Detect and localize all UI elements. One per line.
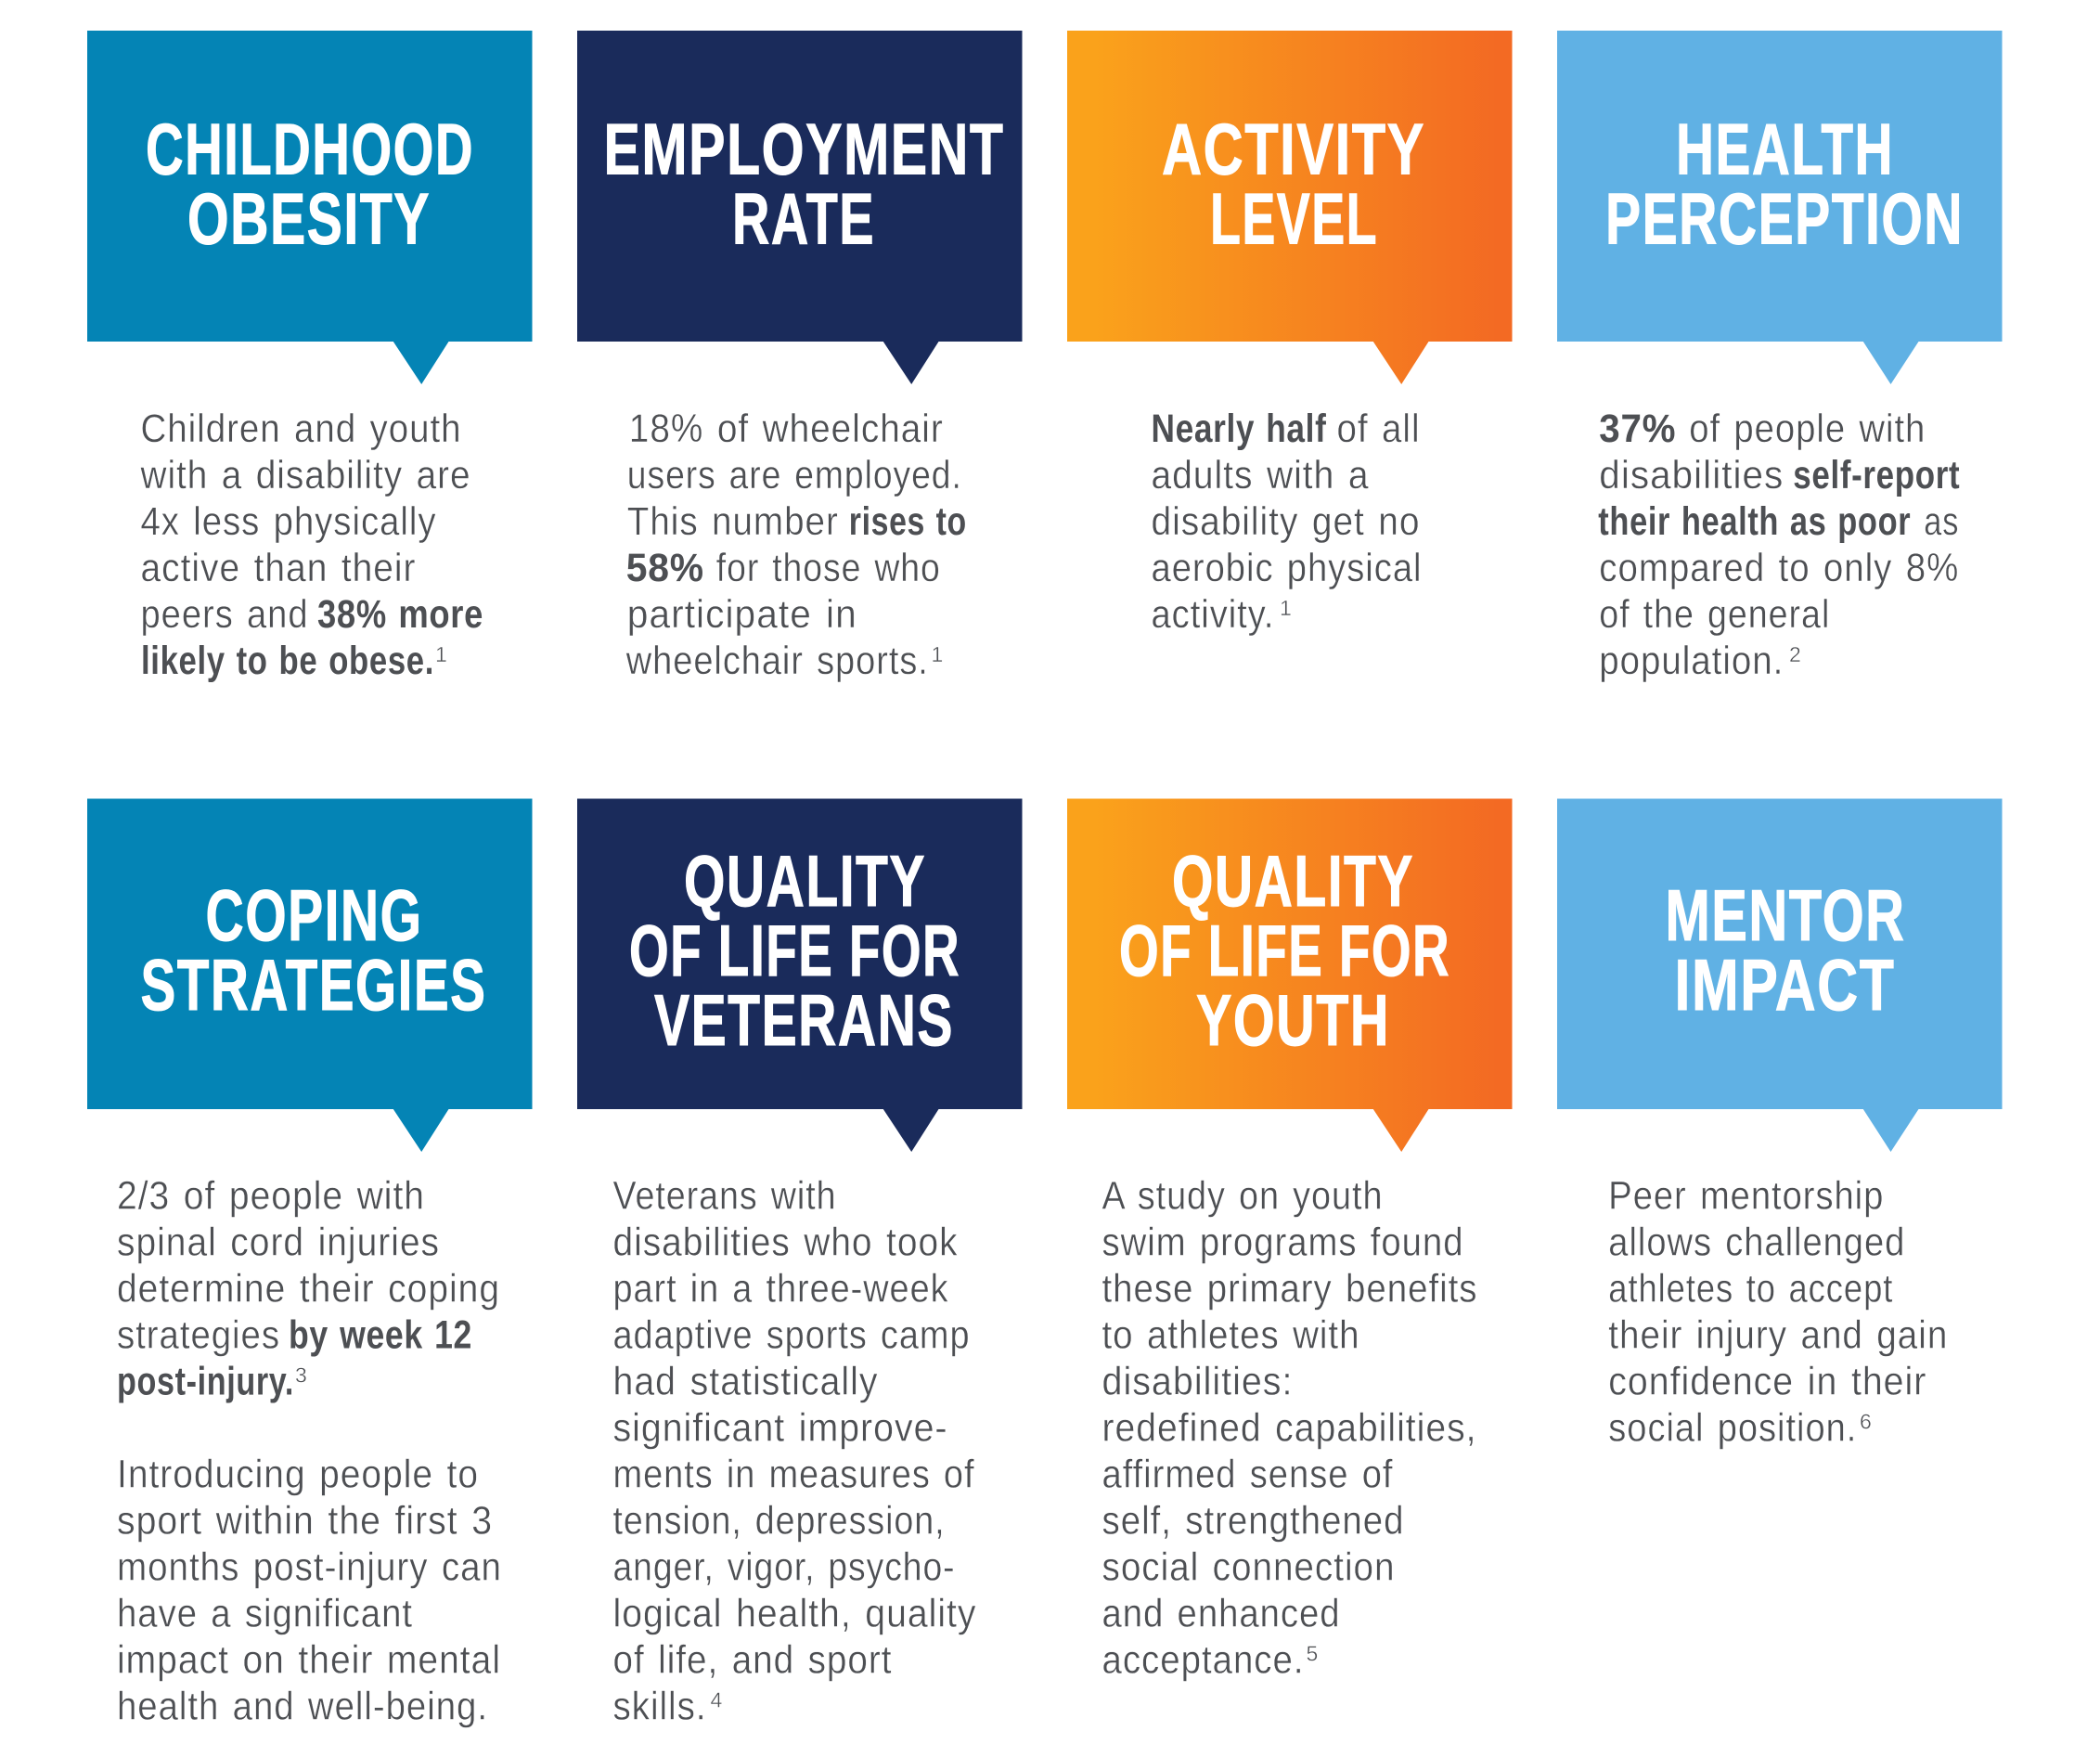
heading: childhood obesity <box>146 108 474 260</box>
text: quality of life for veterans: significant improve- <box>612 1405 948 1450</box>
text: quality of life for veterans: logical health, quality <box>612 1591 976 1635</box>
text: coping strategies: health and well-being. <box>117 1684 488 1728</box>
panel: activity level <box>1067 31 1513 637</box>
text: quality of life for veterans: skills. <box>612 1684 707 1728</box>
heading: employment rate: EMPLOYMENT <box>603 108 1004 189</box>
text: quality of life for youth: and enhanced <box>1102 1591 1340 1635</box>
heading: employment rate <box>603 108 1004 260</box>
heading: quality of life for veterans <box>629 840 960 1061</box>
text: childhood obesity: active than their <box>141 546 416 590</box>
text: coping strategies: 3 <box>295 1363 307 1387</box>
text: health perception: of the general <box>1599 592 1830 637</box>
heading: coping strategies: STRATEGIES <box>141 944 486 1026</box>
text: activity level: Nearly half <box>1151 407 1327 451</box>
heading: childhood obesity: OBESITY <box>187 178 431 260</box>
text: quality of life for youth: swim programs found <box>1102 1220 1464 1264</box>
text: quality of life for veterans: anger, vigor, psycho- <box>612 1544 956 1589</box>
text: employment rate <box>625 407 967 683</box>
text: quality of life for youth: social connection <box>1102 1544 1396 1589</box>
heading: mentor impact: IMPACT <box>1674 944 1895 1026</box>
text: coping strategies: 2/3 of people with <box>117 1173 425 1218</box>
text: coping strategies: determine their coping <box>117 1266 500 1311</box>
text: quality of life for veterans: part in a three-week <box>612 1266 948 1311</box>
text: health perception: compared to only 8% <box>1599 546 1959 590</box>
panel: coping strategies <box>87 798 533 1728</box>
text: coping strategies: impact on their mental <box>117 1637 501 1682</box>
text: activity level: disability get no <box>1151 499 1420 544</box>
text: employment rate: This number <box>627 499 839 544</box>
text: mentor impact: 6 <box>1860 1409 1872 1433</box>
text: employment rate: 58% <box>626 546 704 590</box>
heading: coping strategies <box>141 874 486 1026</box>
text: quality of life for youth: self, strengthened <box>1102 1498 1405 1543</box>
text: mentor impact: their injury and gain <box>1608 1312 1948 1357</box>
heading: quality of life for youth <box>1119 840 1450 1061</box>
text: quality of life for youth: A study on youth <box>1102 1173 1383 1218</box>
text: quality of life for veterans <box>612 1173 976 1728</box>
text: mentor impact: confidence in their <box>1608 1359 1926 1403</box>
heading: quality of life for veterans: OF LIFE FOR <box>629 910 960 991</box>
text: mentor impact <box>1608 1173 1948 1450</box>
text: health perception <box>1598 407 1960 683</box>
text: activity level: activity. <box>1151 592 1275 637</box>
text: health perception: population. <box>1599 639 1784 683</box>
heading: coping strategies: COPING <box>206 874 423 956</box>
callout box: health perception <box>1557 31 2003 384</box>
text: employment rate: rises to <box>849 499 967 544</box>
text: coping strategies: strategies <box>117 1312 280 1357</box>
panel: mentor impact <box>1557 798 2003 1450</box>
text: health perception: disabilities <box>1599 453 1784 497</box>
panel: health perception <box>1557 31 2003 683</box>
text: employment rate: 18% of wheelchair <box>629 407 944 451</box>
text: coping strategies: by week 12 <box>289 1312 472 1357</box>
text: quality of life for veterans: disabilities who took <box>612 1220 958 1264</box>
callout box: quality of life for youth <box>1067 798 1513 1152</box>
heading: mentor impact: MENTOR <box>1665 874 1906 956</box>
text: childhood obesity: likely to be obese. <box>141 639 434 683</box>
heading: health perception <box>1605 108 1964 260</box>
heading: childhood obesity: CHILDHOOD <box>146 108 474 189</box>
panel: quality of life for veterans <box>577 798 1023 1728</box>
heading: quality of life for veterans: VETERANS <box>654 979 954 1061</box>
callout box: childhood obesity <box>87 31 533 384</box>
heading: activity level: ACTIVITY <box>1162 108 1425 189</box>
text: activity level <box>1151 407 1422 637</box>
text: childhood obesity: 1 <box>435 642 447 666</box>
text: health perception: as <box>1924 499 1959 544</box>
text: quality of life for veterans: 4 <box>711 1687 722 1712</box>
callout box: coping strategies <box>87 798 533 1152</box>
text: coping strategies: have a significant <box>117 1591 413 1635</box>
text: coping strategies <box>117 1173 502 1728</box>
text: health perception: 2 <box>1789 642 1801 666</box>
text: quality of life for veterans: ments in measures of <box>612 1452 974 1496</box>
text: employment rate: participate in <box>627 592 857 637</box>
text: quality of life for youth: 5 <box>1307 1641 1318 1665</box>
heading: mentor impact <box>1665 874 1906 1026</box>
text: coping strategies: Introducing people to <box>117 1452 479 1496</box>
text: quality of life for youth: acceptance. <box>1102 1637 1305 1682</box>
text: activity level: 1 <box>1280 596 1292 620</box>
text: health perception: self-report <box>1793 453 1960 497</box>
text: mentor impact: athletes to accept <box>1608 1266 1893 1311</box>
heading: employment rate: RATE <box>732 178 875 260</box>
text: quality of life for veterans: Veterans with <box>612 1173 837 1218</box>
text: mentor impact: allows challenged <box>1608 1220 1905 1264</box>
panel: quality of life for youth <box>1067 798 1513 1682</box>
text: childhood obesity: peers and <box>141 592 308 637</box>
text: quality of life for veterans: tension, depression, <box>612 1498 945 1543</box>
heading: activity level: LEVEL <box>1210 178 1378 260</box>
heading: health perception: HEALTH <box>1676 108 1894 189</box>
heading: quality of life for youth: OF LIFE FOR <box>1119 910 1450 991</box>
text: quality of life for veterans: had statistically <box>612 1359 878 1403</box>
text: childhood obesity: with a disability are <box>140 453 470 497</box>
text: activity level: aerobic physical <box>1151 546 1422 590</box>
text: activity level: of all <box>1336 407 1420 451</box>
text: employment rate: users are employed. <box>627 453 962 497</box>
text: mentor impact: Peer mentorship <box>1608 1173 1884 1218</box>
text: quality of life for veterans: adaptive sports camp <box>612 1312 971 1357</box>
text: childhood obesity: Children and youth <box>141 407 462 451</box>
text: employment rate: for those who <box>716 546 941 590</box>
text: quality of life for youth: affirmed sense of <box>1102 1452 1394 1496</box>
text: quality of life for youth: redefined capabilities, <box>1102 1405 1477 1450</box>
text: quality of life for youth <box>1102 1173 1477 1682</box>
text: quality of life for youth: to athletes with <box>1102 1312 1360 1357</box>
text: childhood obesity <box>140 407 483 683</box>
heading: quality of life for youth: QUALITY <box>1172 840 1414 922</box>
callout box: mentor impact <box>1557 798 2003 1152</box>
callout box: activity level <box>1067 31 1513 384</box>
heading: health perception: PERCEPTION <box>1605 178 1964 260</box>
text: coping strategies: sport within the first 3 <box>117 1498 493 1543</box>
callout box: quality of life for veterans <box>577 798 1023 1152</box>
panel: childhood obesity <box>87 31 533 683</box>
heading: quality of life for veterans: QUALITY <box>684 840 926 922</box>
text: coping strategies: post-injury. <box>117 1359 294 1403</box>
heading: activity level <box>1162 108 1425 260</box>
text: health perception: their health as poor <box>1598 499 1911 544</box>
text: quality of life for youth: these primary benefits <box>1102 1266 1477 1311</box>
text: employment rate: wheelchair sports. <box>625 639 929 683</box>
text: health perception: 37% <box>1599 407 1676 451</box>
text: mentor impact: social position. <box>1608 1405 1857 1450</box>
text: coping strategies: months post-injury can <box>117 1544 502 1589</box>
panel: employment rate <box>577 31 1023 683</box>
text: quality of life for veterans: of life, and sport <box>612 1637 893 1682</box>
text: activity level: adults with a <box>1151 453 1370 497</box>
text: health perception: of people with <box>1689 407 1926 451</box>
text: quality of life for youth: disabilities: <box>1102 1359 1294 1403</box>
callout box: employment rate <box>577 31 1023 384</box>
text: childhood obesity: 4x less physically <box>141 499 436 544</box>
text: employment rate: 1 <box>932 642 943 666</box>
text: childhood obesity: 38% more <box>317 592 483 637</box>
text: coping strategies: spinal cord injuries <box>117 1220 440 1264</box>
heading: quality of life for youth: YOUTH <box>1196 979 1390 1061</box>
